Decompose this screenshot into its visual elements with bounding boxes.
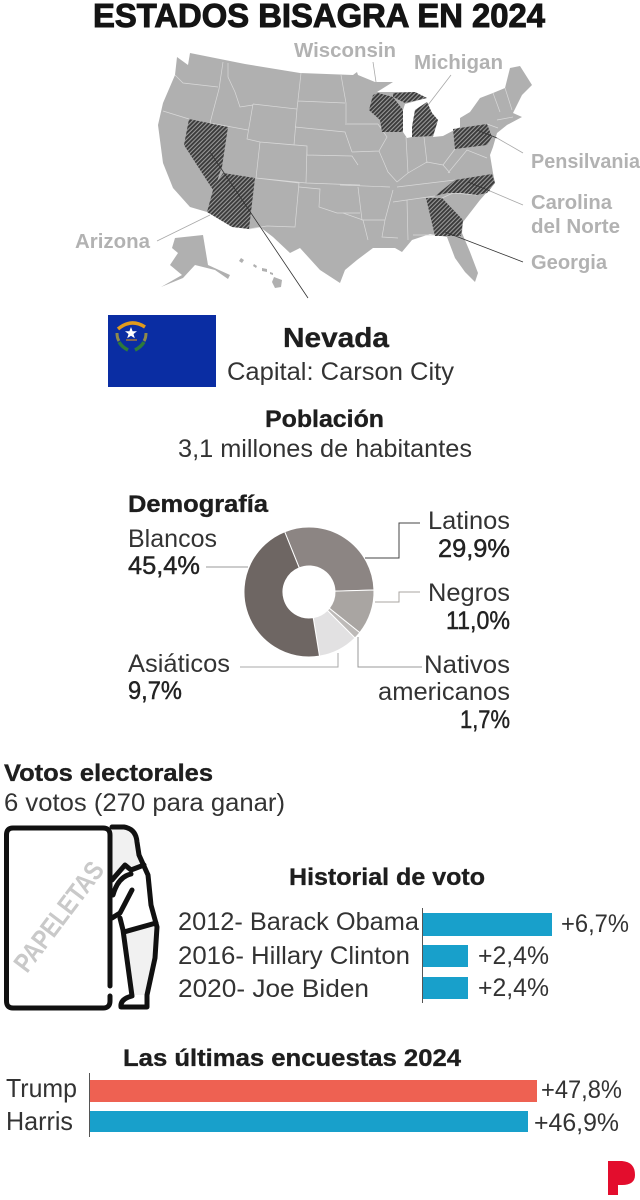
- icon: logo P: [608, 1161, 635, 1195]
- row: Harris: +46,9%: [534, 1109, 619, 1137]
- heading: Las últimas encuestas 2024: Las últimas encuestas 2024: [123, 1045, 462, 1072]
- label: Negros: [428, 579, 510, 635]
- label: Latinos: [428, 507, 510, 563]
- panel: demography: [128, 491, 510, 734]
- swing state: Carolina del Norte: [435, 174, 495, 196]
- label: Nativos americanos: Nativos: [424, 651, 510, 679]
- row: 2016: 2016- Hillary Clinton: [178, 942, 410, 970]
- leader lines: [157, 62, 523, 298]
- text: electoral votes: 6 votos (270 para ganar): [4, 789, 285, 817]
- label: Nativos americanos: 1,7%: [460, 706, 510, 734]
- leader lines: [206, 523, 422, 667]
- label: Nativos americanos: americanos: [378, 678, 510, 706]
- label: Carolina del Norte: Carolina: [531, 192, 613, 214]
- label: Latinos: Latinos: [428, 507, 510, 535]
- panel: vote history: [178, 864, 629, 1003]
- label: Michigan: Michigan: [414, 52, 503, 74]
- row: Trump: Trump: [6, 1073, 77, 1103]
- row: 2020: [178, 974, 549, 1003]
- label: Negros: Negros: [428, 579, 510, 607]
- label: Latinos: 29,9%: [438, 535, 510, 563]
- text: capital: Capital: Carson City: [227, 358, 455, 386]
- row: Trump: +47,8%: [541, 1076, 622, 1104]
- row: 2020: +2,4%: [478, 974, 549, 1002]
- heading: Demografía: Demografía: [128, 491, 269, 518]
- row: Harris: Harris: [6, 1106, 73, 1136]
- row: 2020: 2020- Joe Biden: [178, 975, 369, 1003]
- label: Georgia: Georgia: [531, 252, 608, 274]
- map labels: [75, 40, 640, 298]
- label: Asiáticos: Asiáticos: [128, 650, 230, 678]
- axis: [88, 1073, 90, 1137]
- axis: [422, 908, 424, 1003]
- stamp: PAPELETAS: PAPELETAS: [8, 856, 110, 978]
- panel: latest polls: [6, 1045, 622, 1137]
- label: Asiáticos: [128, 650, 230, 705]
- heading: Población: Población: [265, 406, 384, 433]
- label: Blancos: [128, 525, 217, 580]
- row: 2012: +6,7%: [561, 910, 629, 938]
- label: Blancos: 45,4%: [128, 552, 200, 580]
- text: population: 3,1 millones de habitantes: [178, 435, 472, 463]
- swing state: Wisconsin: [369, 93, 403, 132]
- label: Pensilvania: Pensilvania: [531, 151, 640, 173]
- label: Carolina del Norte: del Norte: [531, 216, 620, 238]
- heading: Votos electorales: Votos electorales: [4, 760, 213, 787]
- icon: person behind ballot box: [6, 827, 158, 1008]
- heading: Nevada: Nevada: [283, 322, 389, 353]
- label: Asiáticos: 9,7%: [128, 677, 182, 705]
- row: Harris: [6, 1106, 619, 1137]
- swing state: Pensilvania: [453, 124, 492, 149]
- label: Blancos: Blancos: [128, 525, 217, 553]
- donut chart: [244, 527, 374, 657]
- row: 2016: +2,4%: [478, 942, 549, 970]
- label: Carolina del Norte: [531, 192, 620, 238]
- row: Trump: [6, 1073, 622, 1104]
- map: United States swing states: [158, 53, 532, 288]
- label: Wisconsin: Wisconsin: [294, 40, 396, 62]
- label: Arizona: Arizona: [75, 231, 151, 253]
- state borders: [163, 62, 513, 240]
- heading: Historial de voto: Historial de voto: [289, 864, 485, 891]
- row: 2016: [178, 942, 549, 970]
- icon: Nevada flag: [108, 315, 216, 387]
- label: Nativos americanos: [378, 651, 510, 734]
- row: 2012: 2012- Barack Obama: [178, 908, 419, 936]
- swing state: Georgia: [426, 198, 463, 236]
- contiguous US: [158, 53, 532, 283]
- swing state: Nevada: [184, 119, 228, 190]
- swing state: Michigan: [393, 92, 438, 137]
- Alaska and Hawaii: [161, 235, 282, 288]
- label: Negros: 11,0%: [446, 607, 510, 635]
- row: 2012: [178, 908, 629, 938]
- swing state: Arizona: [207, 173, 255, 229]
